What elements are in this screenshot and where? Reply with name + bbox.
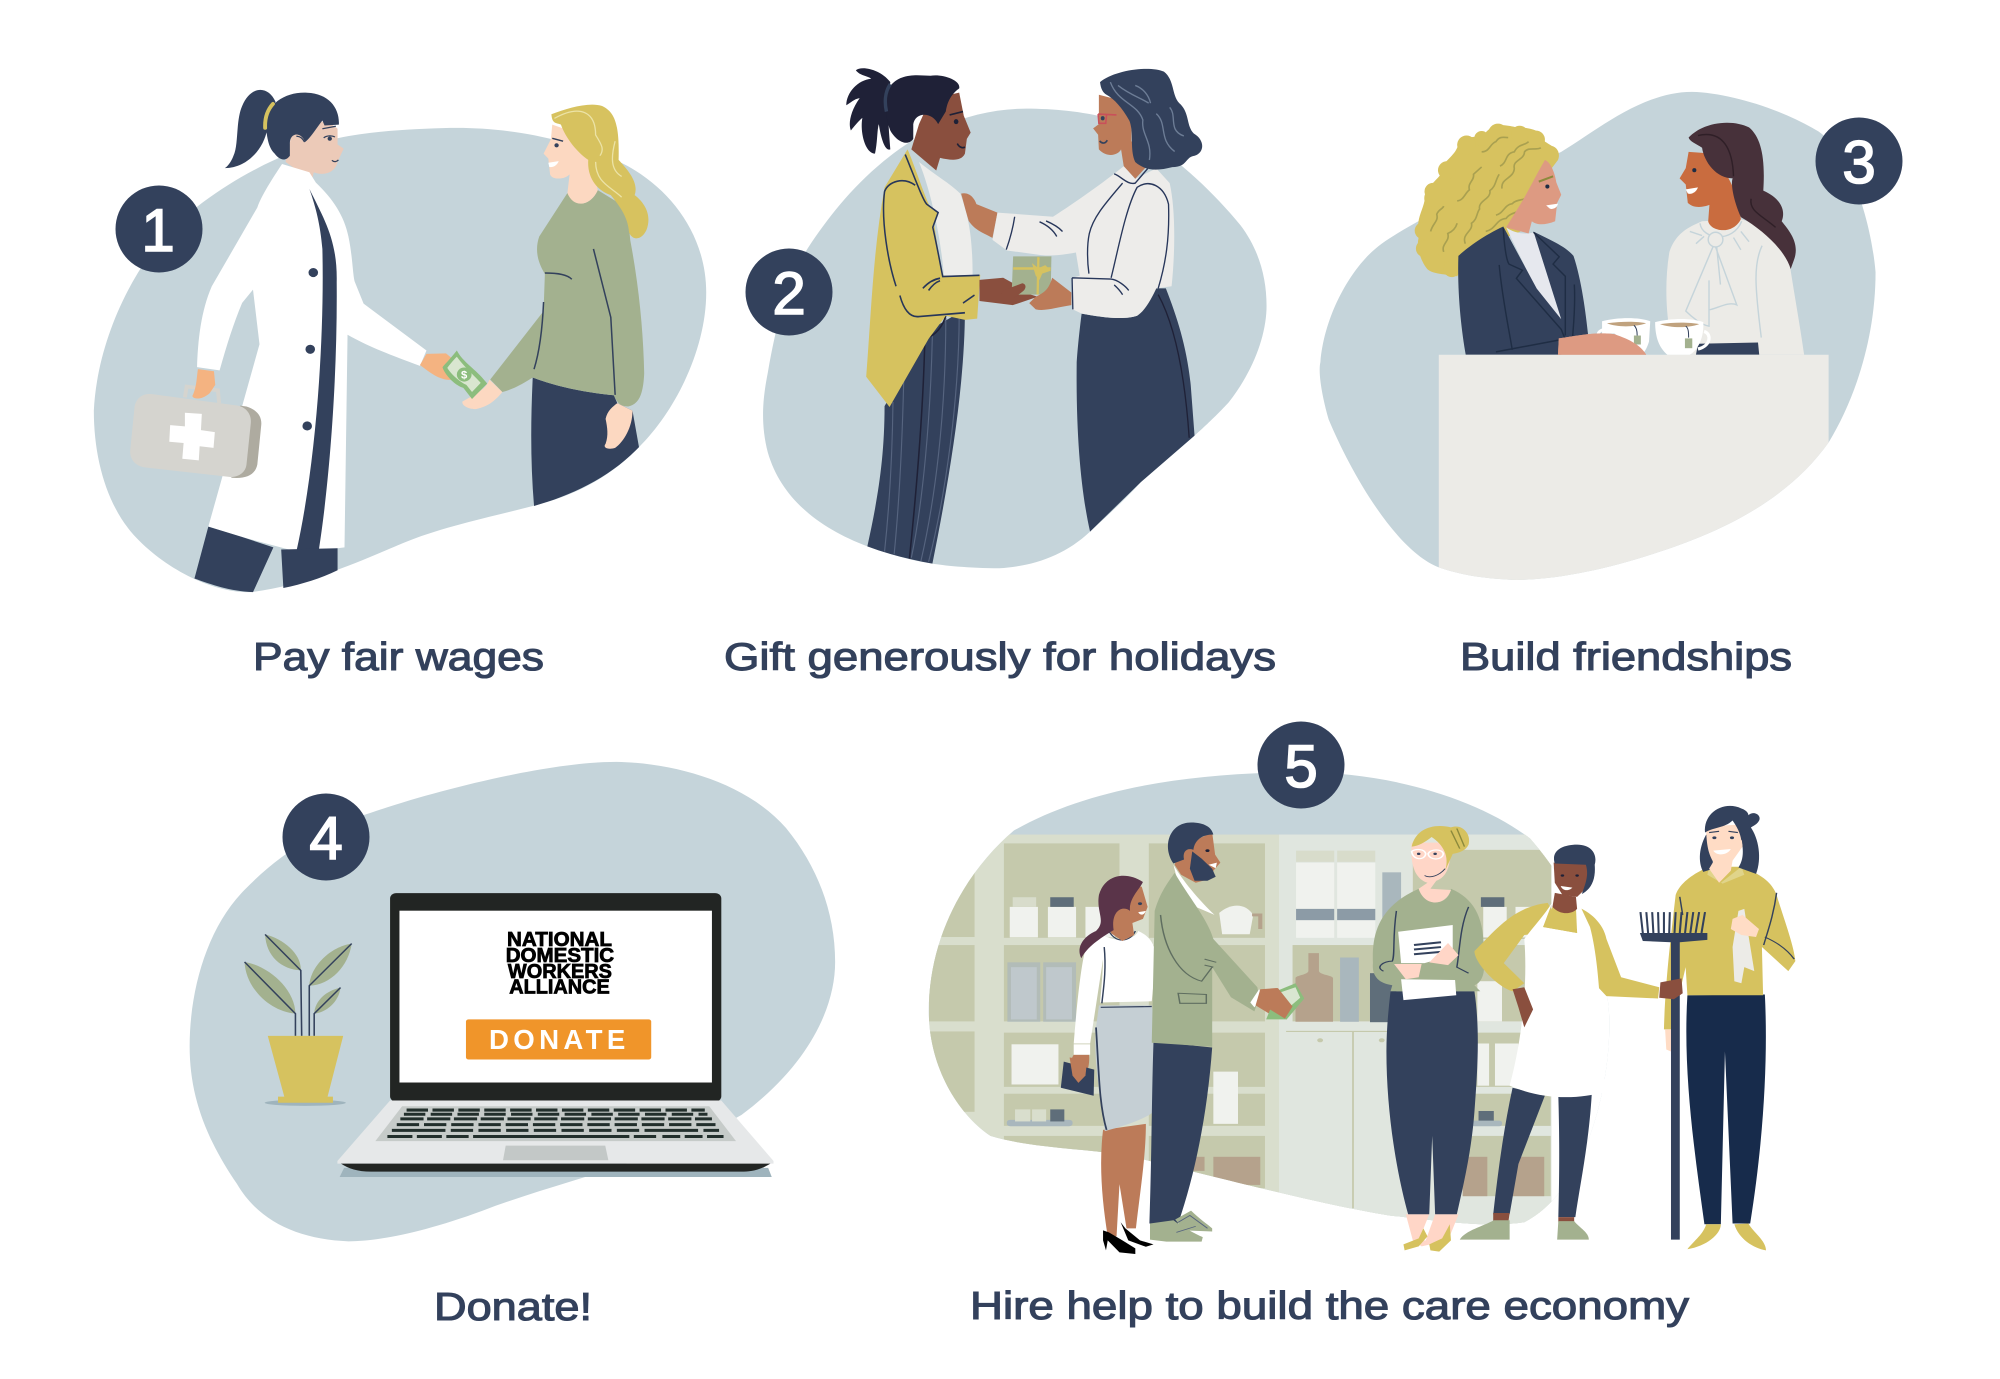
- caption 5: Hire help to build the care economy: [970, 1285, 1690, 1328]
- illustration: two women having tea at a counter: [1320, 92, 1876, 580]
- illustration: team in a pantry store: [920, 772, 1795, 1254]
- illustration: two women exchanging a gift: [763, 68, 1267, 568]
- donate button: DONATE: [489, 1024, 625, 1055]
- badge 5: 5: [1284, 733, 1318, 800]
- woman in white blouse: [961, 69, 1202, 532]
- logo: National Domestic Workers Alliance: WORKERS: [508, 960, 612, 983]
- icon: banknote: [443, 351, 487, 399]
- badge 5: [1258, 722, 1344, 808]
- badge 4: [282, 794, 370, 880]
- panel: build friendships: [1320, 92, 1902, 679]
- blob background: [1320, 92, 1876, 580]
- logo: National Domestic Workers Alliance: ALLIANCE: [509, 975, 610, 998]
- caption 1: Pay fair wages: [253, 636, 544, 679]
- illustration: doctor paying a worker: [94, 90, 706, 592]
- blob background: [190, 762, 835, 1241]
- badge 2: [746, 248, 832, 336]
- woman in yellow jacket: [846, 68, 980, 564]
- panel: gift generously: [724, 68, 1276, 679]
- panel: donate: [190, 762, 835, 1329]
- logo: National Domestic Workers Alliance: [506, 927, 615, 998]
- badge 2: 2: [772, 260, 806, 327]
- woman with dark wavy hair: [1666, 123, 1804, 355]
- woman with clipboard: [1373, 826, 1484, 1252]
- doctor figure: [194, 90, 452, 592]
- curly haired woman: [1415, 124, 1646, 355]
- man with broom: [1640, 806, 1795, 1250]
- blob background: [94, 128, 706, 592]
- caption 2: Gift generously for holidays: [724, 636, 1276, 679]
- illustration: laptop and plant: [190, 762, 835, 1241]
- icon: tea cups: [1558, 318, 1709, 355]
- woman with clutch: [1061, 876, 1156, 1254]
- badge 1: 1: [141, 197, 175, 264]
- icon: banknote: $: [461, 369, 467, 381]
- logo: National Domestic Workers Alliance: NATIONAL: [507, 927, 612, 950]
- caption 4: Donate!: [434, 1286, 592, 1329]
- badge 4: 4: [309, 805, 343, 872]
- icon: medical case: [130, 369, 261, 478]
- blonde worker figure: [462, 105, 648, 506]
- blob background: [929, 772, 1609, 1224]
- worker in apron: [1460, 845, 1659, 1240]
- icon: gift box and hands: [979, 256, 1071, 310]
- icon: laptop: [337, 893, 774, 1177]
- panel: hire help: [920, 722, 1795, 1328]
- man in green blazer: [1149, 823, 1304, 1242]
- caption 3: Build friendships: [1460, 636, 1792, 679]
- counter: [1439, 355, 1829, 580]
- icon: potted plant: [245, 934, 352, 1106]
- blob background: [763, 109, 1267, 568]
- badge 3: [1816, 118, 1902, 204]
- donate button: [466, 1019, 651, 1060]
- badge 1: [116, 186, 202, 272]
- panel: pay fair wages: [94, 90, 706, 679]
- logo: National Domestic Workers Alliance: DOMESTIC: [506, 944, 615, 967]
- store shelves: [920, 835, 1616, 1236]
- badge 3: 3: [1842, 129, 1876, 196]
